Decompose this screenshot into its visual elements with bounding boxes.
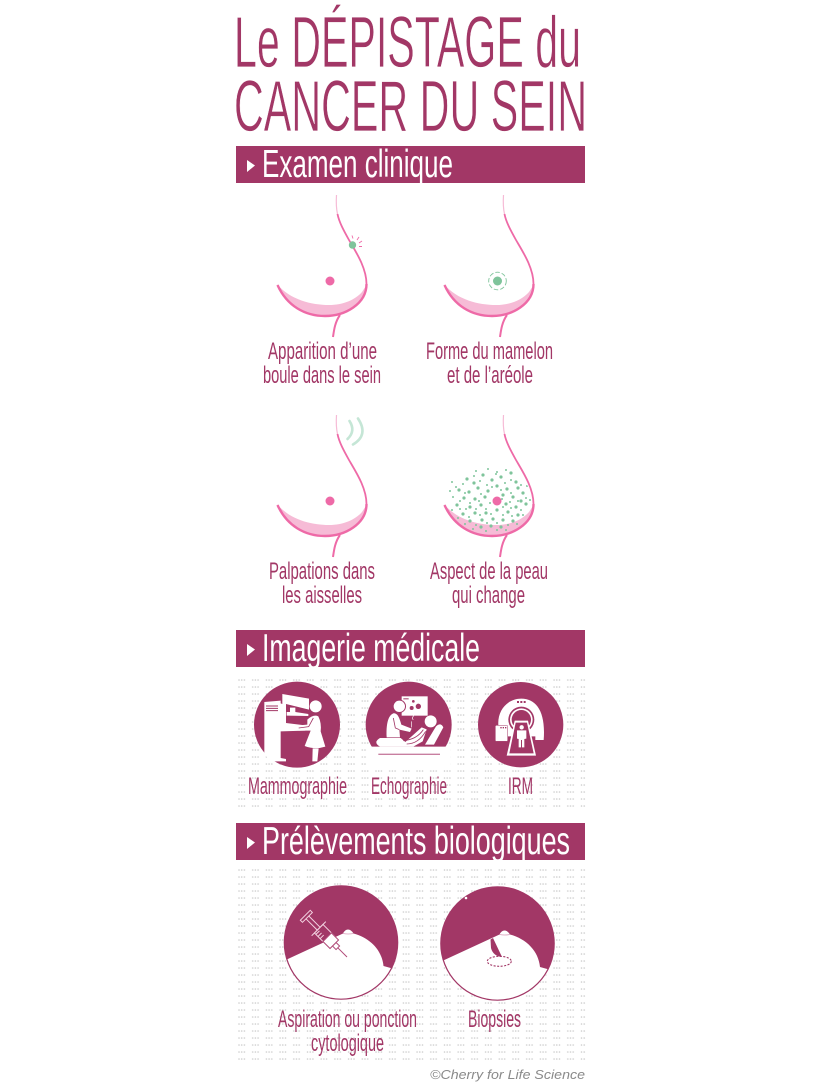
panel: aisselles (269, 415, 375, 609)
heading: Examen clinique: Examen clinique (262, 143, 453, 186)
label: Aspiration ou ponction (278, 1006, 417, 1057)
icon: IRM (478, 682, 563, 767)
label: qui change (452, 582, 525, 609)
background dots: imagerie (238, 677, 586, 810)
panel: boule dans le sein (263, 195, 381, 389)
label: les aisselles (282, 582, 362, 609)
title (234, 3, 587, 147)
label: IRM: IRM (508, 773, 533, 800)
icon: biopsie (441, 887, 554, 1001)
label (426, 338, 553, 389)
icon: mammographie (254, 682, 340, 768)
credit: ©Cherry for Life Science (430, 1067, 585, 1082)
icon: échographie (366, 682, 452, 769)
icon: palpation waves (348, 418, 362, 444)
heading: Prélèvements biologiques: Prélèvements biologiques (262, 820, 570, 863)
heading: Imagerie médicale: Imagerie médicale (262, 627, 480, 670)
label (269, 558, 375, 609)
panel: mamelon et aréole (426, 195, 553, 389)
label: et de l’aréole (447, 362, 533, 389)
heading: Prélèvements biologiques (236, 820, 585, 863)
icon: aspiration (284, 886, 398, 1000)
label: Palpations dans (269, 558, 375, 585)
icon: nipple and areola (489, 272, 506, 290)
label: Forme du mamelon (426, 338, 553, 365)
icon: syringe (298, 908, 354, 964)
panel: aspect de la peau (430, 415, 548, 609)
label: Aspiration ou ponction: Aspiration ou ponction (278, 1006, 417, 1033)
background dots: prélèvements (238, 868, 586, 1063)
label: Mammographie: Mammographie (248, 773, 347, 800)
label: Aspect de la peau (430, 558, 548, 585)
icon: lump (349, 236, 362, 249)
label: Apparition d’une (268, 338, 377, 365)
label (263, 338, 381, 389)
icon: biopsy blade (490, 938, 502, 957)
label (430, 558, 548, 609)
label: boule dans le sein (263, 362, 381, 389)
label: Biopsies: Biopsies (468, 1006, 521, 1033)
icon: skin speckles (450, 469, 530, 531)
label: Aspiration ou ponction: cytologique (311, 1030, 384, 1057)
label: Echographie: Echographie (371, 773, 447, 800)
